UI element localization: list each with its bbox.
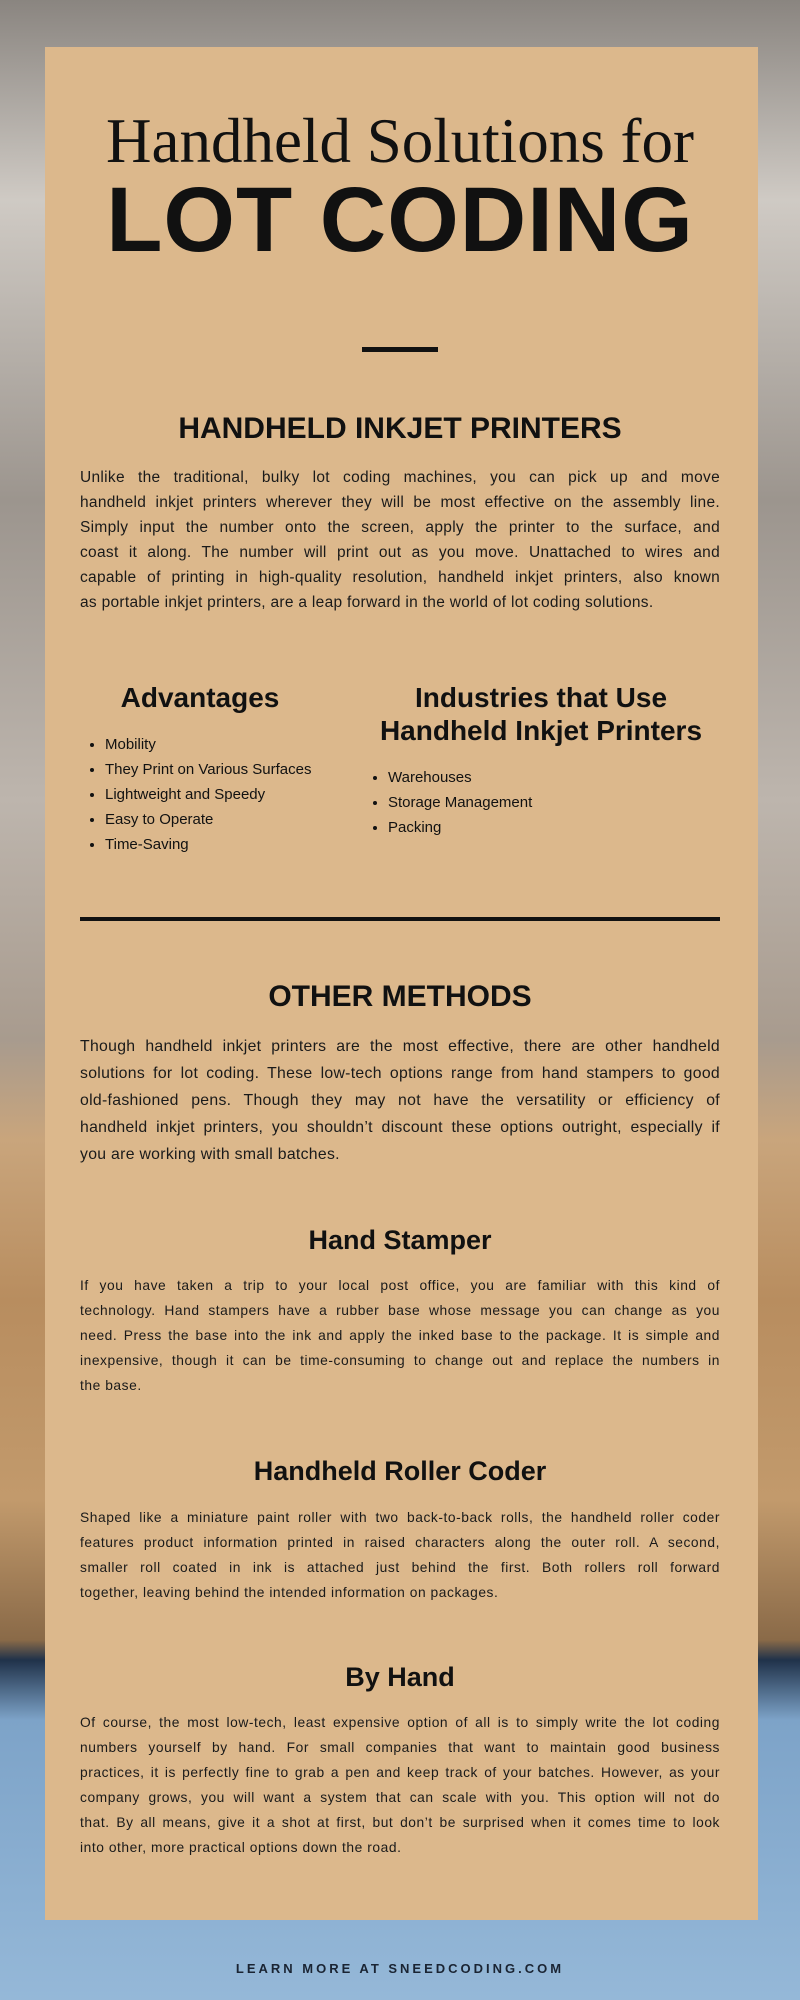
text: roller coder: smaller roll coated in ink is attached just behind the first. Both rollers roll forward — [80, 1560, 720, 1575]
text: other methods: Though handheld inkjet printers are the most effective, there are other handheld — [80, 1038, 720, 1055]
title line 1: Handheld Solutions for — [106, 106, 694, 176]
text: roller coder — [80, 1510, 720, 1600]
text: hand stamper: the base. — [80, 1378, 142, 1393]
text: inkjet intro — [80, 469, 720, 611]
text: inkjet intro: Unlike the traditional, bulky lot coding machines, you can pick up and move — [80, 469, 720, 486]
list: industries: Storage Management — [388, 794, 532, 811]
text: hand stamper — [80, 1278, 720, 1393]
text: by hand: numbers yourself by hand. For small companies that want to maintain good business — [80, 1740, 720, 1755]
text: hand stamper: inexpensive, though it can be time-consuming to change out and replace the numbers in — [80, 1353, 720, 1368]
text: hand stamper: technology. Hand stampers have a rubber base whose message you can change as you — [80, 1303, 720, 1318]
text: hand stamper: need. Press the base into the ink and apply the inked base to the package. It is simple and — [80, 1328, 720, 1343]
text: other methods — [80, 1038, 720, 1163]
list: industries: Warehouses — [388, 769, 472, 786]
text: by hand: company grows, you will want a system that can scale with you. This option will not do — [80, 1790, 720, 1805]
text: other methods: handheld inkjet printers, you shouldn’t discount these options outright, especially if — [80, 1119, 720, 1136]
text: inkjet intro: Simply input the number onto the screen, apply the printer to the surface, and — [80, 519, 720, 536]
heading: handheld inkjet printers: HANDHELD INKJET PRINTERS — [178, 412, 622, 445]
heading: roller coder: Handheld Roller Coder — [254, 1456, 546, 1486]
text: by hand: into other, more practical options down the road. — [80, 1840, 401, 1855]
footer: LEARN MORE AT SNEEDCODING.COM — [236, 1961, 564, 1976]
text: by hand — [80, 1715, 720, 1855]
text: inkjet intro: as portable inkjet printers, are a leap forward in the world of lot coding solutions. — [80, 594, 653, 611]
list: advantages: Time-Saving — [105, 836, 189, 853]
list: advantages: Mobility — [105, 736, 156, 753]
list: advantages: They Print on Various Surfaces — [105, 761, 311, 778]
divider rule — [80, 917, 720, 921]
text: inkjet intro: handheld inkjet printers wherever they will be most effective on the assembly line. — [80, 494, 720, 511]
heading: hand stamper: Hand Stamper — [308, 1225, 492, 1255]
list: advantages: Easy to Operate — [105, 811, 213, 828]
text: hand stamper: If you have taken a trip to your local post office, you are familiar with this kind of — [80, 1278, 720, 1293]
list: industries — [373, 769, 532, 836]
text: other methods: old-fashioned pens. Though they may not have the versatility or efficiency of — [80, 1092, 720, 1109]
text: inkjet intro: coast it along. The number will print out as you move. Unattached to wires and — [80, 544, 720, 561]
text: roller coder: Shaped like a miniature paint roller with two back-to-back rolls, the handheld roller coder — [80, 1510, 720, 1525]
text: by hand: that. By all means, give it a shot at first, but don’t be surprised when it comes time to look — [80, 1815, 720, 1830]
heading: advantages: Advantages — [121, 682, 279, 713]
dash divider — [362, 347, 438, 352]
text: by hand: Of course, the most low-tech, least expensive option of all is to simply write the lot coding — [80, 1715, 720, 1730]
heading: industries: Industries that Use Handheld Inkjet Printers — [380, 682, 702, 746]
text: inkjet intro: capable of printing in high-quality resolution, handheld inkjet printers, also known — [80, 569, 720, 586]
text: roller coder: together, leaving behind the intended information on packages. — [80, 1585, 498, 1600]
text: by hand: practices, it is perfectly fine to grab a pen and keep track of your batches. However, as your — [80, 1765, 720, 1780]
text: roller coder: features product information printed in raised characters along the outer roll. A second, — [80, 1535, 720, 1550]
list: industries: Packing — [388, 819, 441, 836]
list: advantages — [90, 736, 311, 853]
heading: by hand: By Hand — [345, 1662, 455, 1692]
list: advantages: Lightweight and Speedy — [105, 786, 265, 803]
text: other methods: solutions for lot coding. These low-tech options range from hand stampers to good — [80, 1065, 720, 1082]
title line 2: LOT CODING — [106, 169, 694, 271]
heading: other methods: OTHER METHODS — [268, 980, 532, 1013]
text: other methods: you are working with small batches. — [80, 1146, 340, 1163]
